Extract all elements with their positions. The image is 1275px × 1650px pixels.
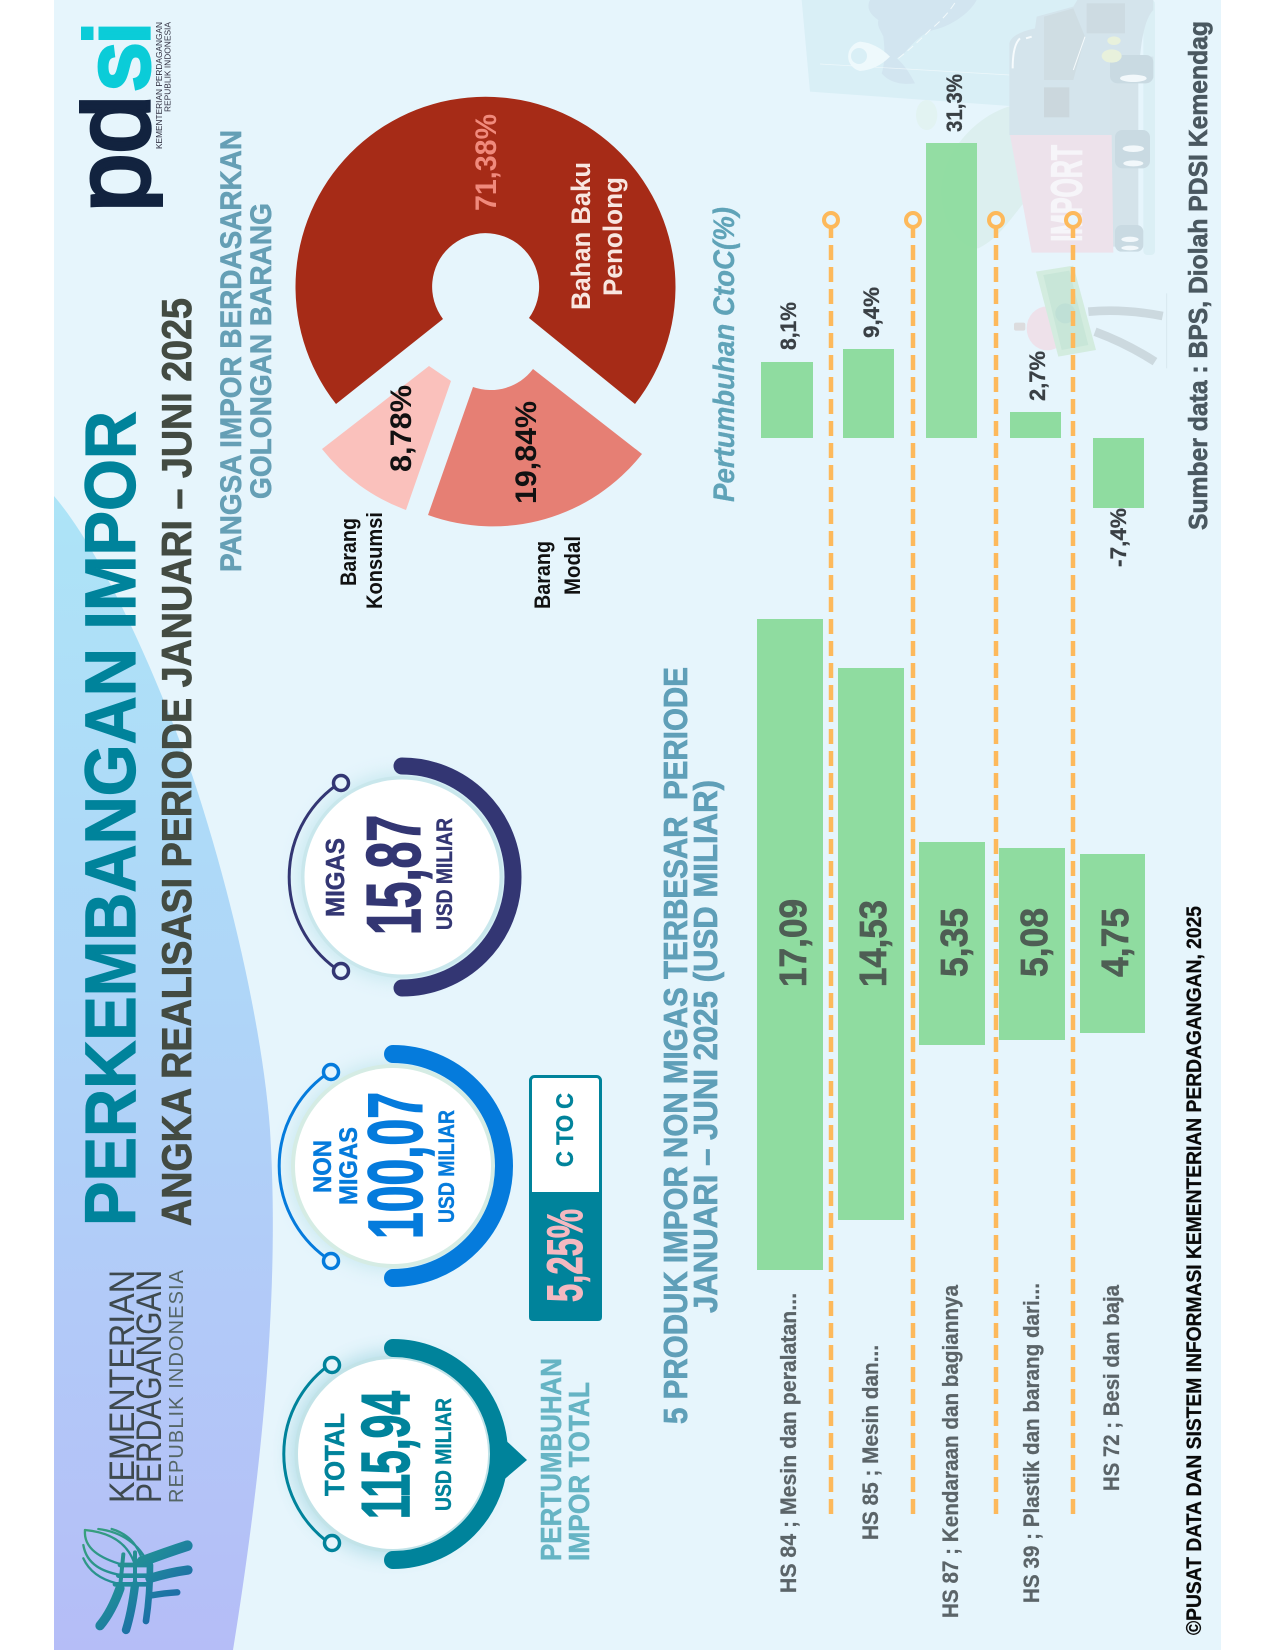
logo: pdsi: si [67, 23, 167, 90]
title: PERKEMBANGAN IMPOR [72, 411, 151, 1226]
bar chart: nilai impor produk: 17,09 [773, 899, 815, 987]
heading: 5 produk impor: JANUARI – JUNI 2025 (USD MILIAR) [687, 780, 724, 1313]
bar chart: nilai impor produk: 14,53 [853, 900, 895, 987]
callout: pertumbuhan impor total label [536, 1358, 596, 1561]
dashed separators with nodes [824, 213, 1080, 1518]
chart: exploded donut: Penolong [598, 177, 628, 296]
logo: pdsi: REPUBLIK INDONESIA [164, 21, 172, 112]
logo: pdsi [79, 22, 170, 208]
bar chart: nilai impor produk [757, 619, 1145, 1270]
gauge: migas [289, 766, 513, 988]
category labels: HS 87 ; Kendaraan dan bagiannya [938, 1284, 963, 1618]
category labels: HS 85 ; Mesin dan... [858, 1345, 883, 1540]
category labels [776, 1283, 1124, 1618]
chart: exploded donut: Modal [560, 536, 585, 595]
subtitle: ANGKA REALISASI PERIODE JANUARI – JUNI 2025 [153, 298, 200, 1226]
chart: exploded donut: Konsumsi [362, 512, 387, 609]
gauge: total impor: USD MILIAR [431, 1398, 456, 1511]
illustration: faded map, truck and person [802, 0, 1167, 368]
bar chart: nilai impor produk: 5,35 [934, 908, 976, 977]
bar chart: pertumbuhan ctoc: -7,4% [1106, 508, 1131, 567]
heading: pertumbuhan ctoc: Pertumbuhan CtoC(%) [708, 207, 741, 502]
logo text: kementerian perdagangan: KEMENTERIAN [103, 1270, 142, 1503]
copyright footer: ©PUSAT DATA DAN SISTEM INFORMASI KEMENTERIAN PERDAGANGAN, 2025 [1183, 906, 1206, 1635]
logo text: kementerian perdagangan: PERDAGANGAN [130, 1270, 169, 1503]
category labels: HS 84 ; Mesin dan peralatan... [776, 1293, 801, 1593]
gauge: non migas [279, 1054, 504, 1278]
bar chart: nilai impor produk: 4,75 [1095, 908, 1137, 977]
callout: c to c 5,25%: 5,25% [537, 1209, 593, 1302]
callout: c to c 5,25%: C TO C [552, 1093, 579, 1167]
illustration: faded map, truck and person: IMPORT [1043, 145, 1092, 242]
gauge: migas: 15,87 [352, 815, 437, 935]
callout: pertumbuhan impor total label: PERTUMBUHAN [536, 1358, 568, 1561]
logo: pdsi: pd [54, 95, 172, 212]
gauge: migas: USD MILIAR [432, 818, 457, 930]
logo: pdsi: KEMENTERIAN PERDAGANGAN [155, 22, 164, 149]
source note: Sumber data : BPS, Diolah PDSI Kemendag [1183, 21, 1213, 530]
bar chart: nilai impor produk: 5,08 [1014, 908, 1056, 977]
chart: exploded donut: 19,84% [510, 401, 543, 504]
category labels: HS 39 ; Plastik dan barang dari... [1019, 1283, 1044, 1603]
heading: pangsa impor: GOLONGAN BARANG [245, 203, 278, 499]
panel: gradient curve [54, 496, 273, 1650]
chart: exploded donut: Bahan Baku [566, 162, 596, 310]
logo text: kementerian perdagangan [103, 1269, 188, 1503]
gauge: migas: MIGAS [320, 838, 350, 917]
logo text: kementerian perdagangan: REPUBLIK INDONESIA [166, 1269, 188, 1503]
gauge: non migas: 100,07 [353, 1092, 439, 1239]
bar chart: pertumbuhan ctoc [761, 74, 1144, 567]
chart: exploded donut: 8,78% [385, 385, 418, 472]
chart: exploded donut [296, 97, 676, 609]
heading: 5 produk impor [657, 667, 724, 1424]
heading: pangsa impor [215, 130, 278, 572]
heading: pangsa impor: PANGSA IMPOR BERDASARKAN [215, 130, 248, 572]
bar chart: pertumbuhan ctoc: 9,4% [859, 287, 884, 338]
heading: 5 produk impor: 5 PRODUK IMPOR NON MIGAS TERBESAR PERIODE [657, 667, 694, 1424]
bar chart: pertumbuhan ctoc: 2,7% [1025, 351, 1050, 401]
gauge: non migas: MIGAS [335, 1127, 363, 1205]
gauge: total impor [284, 1348, 527, 1560]
chart: exploded donut: 71,38% [470, 114, 503, 211]
callout: c to c 5,25% [529, 1076, 602, 1321]
bar chart: pertumbuhan ctoc: 31,3% [942, 74, 967, 132]
chart: exploded donut: Barang [336, 518, 361, 586]
chart: exploded donut: Barang [530, 541, 555, 609]
gauge: non migas: USD MILIAR [434, 1110, 459, 1223]
logo: kementerian perdagangan emblem [83, 1529, 188, 1630]
gauge: total impor: TOTAL [319, 1413, 350, 1496]
bar chart: pertumbuhan ctoc: 8,1% [776, 302, 801, 350]
callout: pertumbuhan impor total label: IMPOR TOTAL [564, 1382, 596, 1561]
gauge: non migas: NON [309, 1140, 337, 1193]
category labels: HS 72 ; Besi dan baja [1099, 1284, 1124, 1491]
gauge: total impor: 115,94 [348, 1391, 424, 1519]
